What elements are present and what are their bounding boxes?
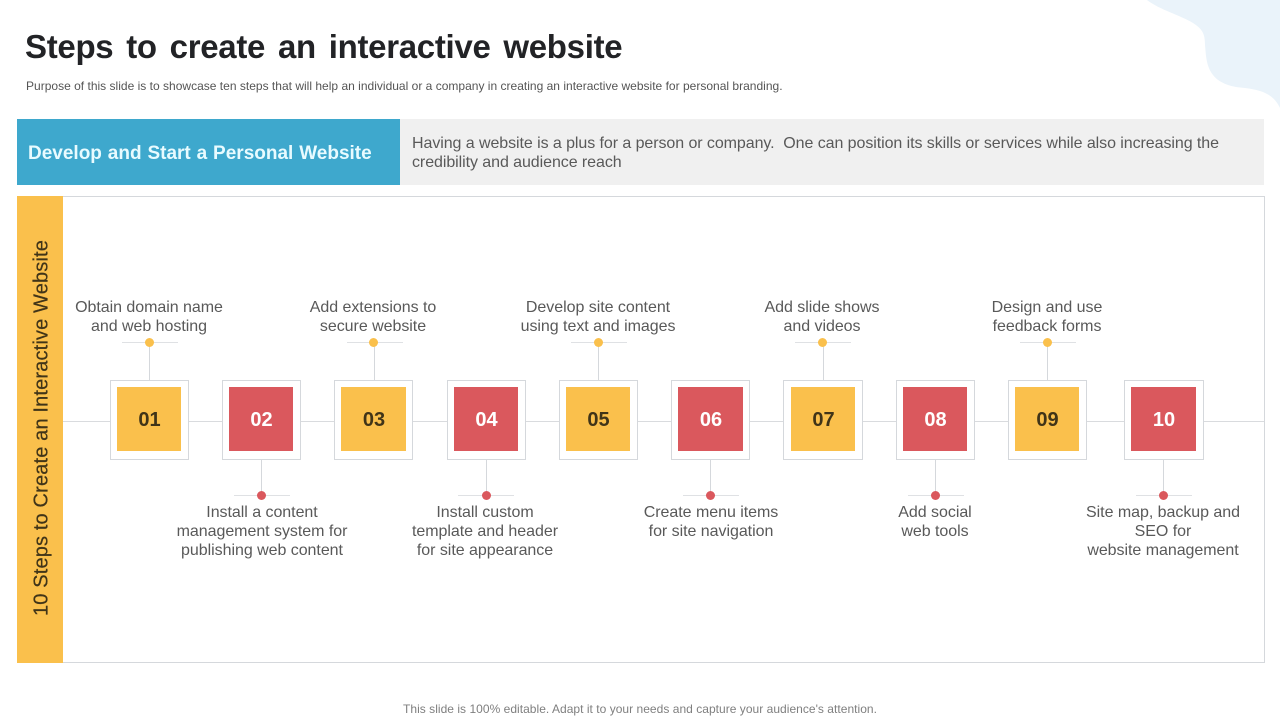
timeline line [63,421,1264,422]
step 02: 02 [250,409,273,431]
step 05: Develop site content [526,299,670,316]
step 05: using text and images [521,318,675,335]
banner heading: Develop and Start a Personal Website [28,143,372,164]
step 04 [412,380,558,559]
step 05: 05 [587,409,610,431]
step 10: website management [1087,542,1239,559]
step 04: Install custom [436,504,534,521]
step 03: 03 [363,409,385,431]
step 02 [177,380,348,559]
step 05 [521,299,675,460]
step 10: SEO for [1135,523,1191,540]
step 01: Obtain domain name [75,299,223,316]
step 01: 01 [138,409,161,431]
step 10 [1086,380,1240,559]
side label [17,196,63,663]
footer note: This slide is 100% editable. Adapt it to your needs and capture your audience's attention. [403,702,877,716]
step 03: Add extensions to [310,299,436,316]
step 07: 07 [812,409,835,431]
step 08: web tools [901,523,969,540]
panel: ten steps timeline [17,196,1265,663]
step 04: 04 [475,409,498,431]
subtitle: Purpose of this slide is to showcase ten steps that will help an individual or a company in creating an interactive website for personal branding. [26,79,783,93]
step 09 [992,299,1102,460]
step 01 [75,299,223,460]
step 10: Site map, backup and [1086,504,1240,521]
step 09: feedback forms [993,318,1101,335]
step 07: Add slide shows [764,299,880,316]
step 07 [764,299,880,460]
step 08 [896,380,975,540]
banner description: Having a website is a plus for a person or company. One can position its skills or services while also increasing the [412,135,1219,152]
step 03 [310,299,436,460]
step 09: 09 [1036,409,1059,431]
decorative corner shape [1148,0,1280,108]
step 08: Add social [898,504,972,521]
side label text: 10 Steps to Create an Interactive Website [30,240,52,616]
step 08: 08 [924,409,947,431]
step 07: and videos [784,318,860,335]
banner [17,119,1264,185]
step 01: and web hosting [91,318,207,335]
banner heading [17,119,400,185]
step 02: management system for [177,523,347,540]
step 06: for site navigation [649,523,773,540]
banner description [412,135,1219,171]
step 02: publishing web content [181,542,343,559]
step 09: Design and use [992,299,1102,316]
title: Steps to create an interactive website [25,28,622,65]
step 10: 10 [1153,409,1175,431]
banner description: credibility and audience reach [412,154,622,171]
step 04: template and header [412,523,558,540]
step 06: Create menu items [644,504,778,521]
step 02: Install a content [206,504,318,521]
step 06: 06 [700,409,722,431]
step 04: for site appearance [417,542,553,559]
step 03: secure website [320,318,426,335]
step 06 [644,380,778,540]
